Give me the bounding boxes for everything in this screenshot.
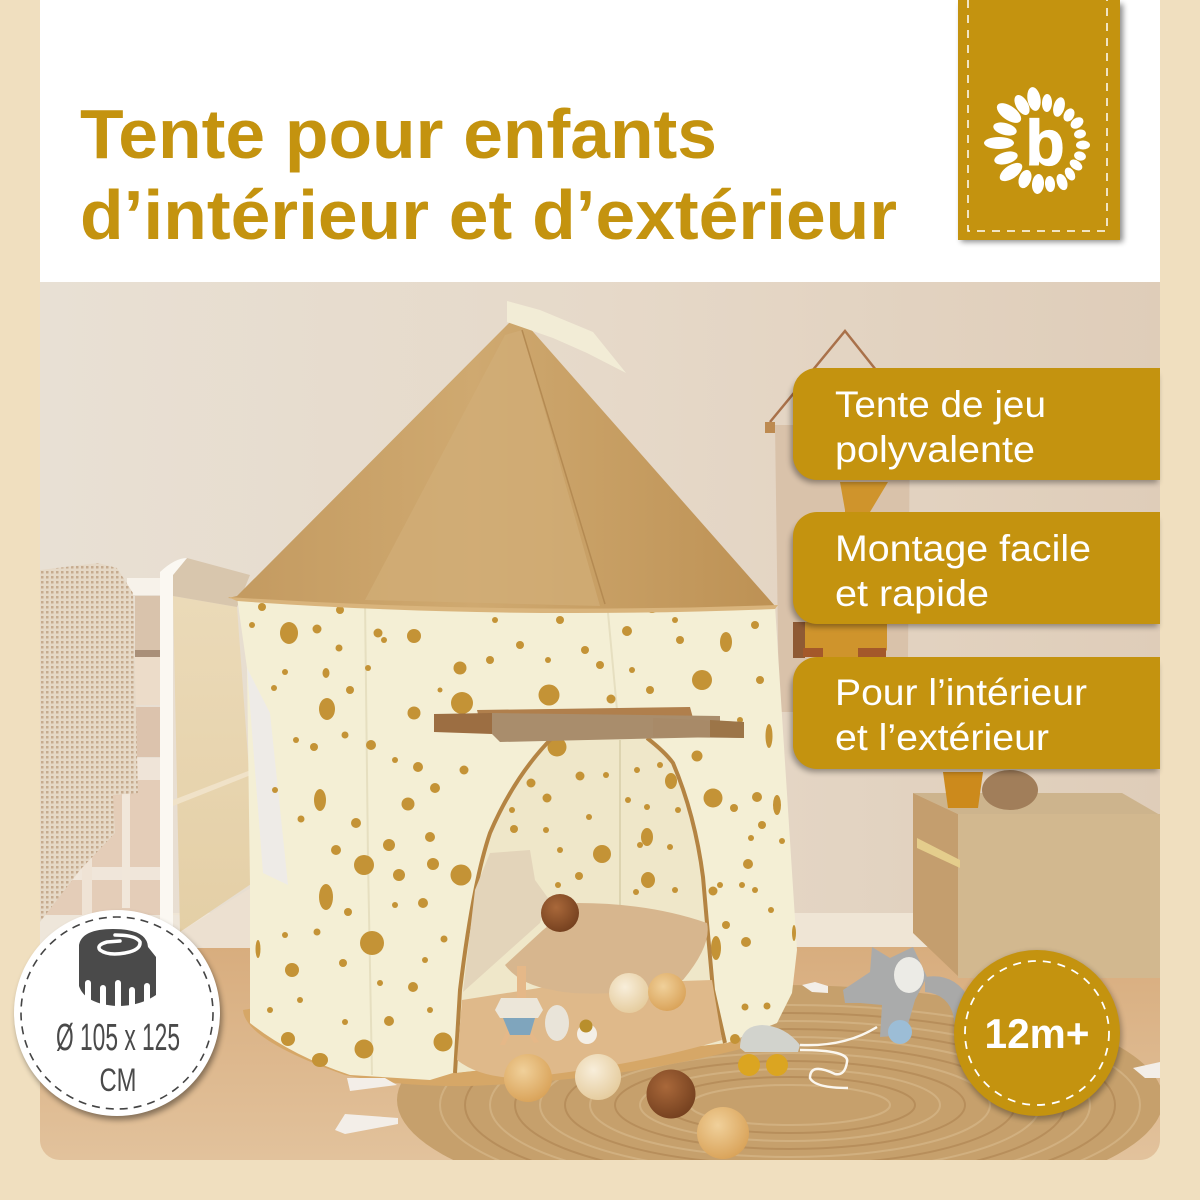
polka dots <box>249 594 796 1067</box>
feature badge 1 <box>791 368 1160 483</box>
size badge <box>14 910 222 1120</box>
tent seams <box>365 600 617 1075</box>
icon: measuring tape <box>79 929 156 1007</box>
feature badge 3: Pour l’intérieur <box>835 672 1087 713</box>
tent base rim <box>243 1008 741 1086</box>
tent roof <box>228 321 778 613</box>
cushions inside tent <box>457 850 722 1078</box>
toy elephant <box>843 947 970 1044</box>
title: d’intérieur et d’extérieur <box>80 176 897 254</box>
rolled door flap <box>434 707 744 742</box>
tent inner seam <box>619 740 621 905</box>
jute rug <box>397 985 1160 1160</box>
feature badge 3: et l’extérieur <box>835 717 1049 758</box>
icon: sun flower logo <box>984 86 1090 194</box>
feature badge 1: Tente de jeu <box>835 384 1046 425</box>
header panel <box>40 0 1160 282</box>
brand logo tag <box>958 0 1123 242</box>
photo: room scene <box>40 282 1163 1200</box>
tent doorway <box>455 737 725 1073</box>
tent window <box>247 668 288 885</box>
feature badge 2 <box>791 512 1160 627</box>
tent body <box>237 594 797 1080</box>
toy pull mouse <box>738 1025 877 1088</box>
feature badge 2: Montage facile <box>835 528 1091 569</box>
knitted blanket <box>40 563 138 922</box>
size text: Ø 105 x 125 <box>56 1017 180 1059</box>
wall <box>40 282 1160 922</box>
feature badge 3 <box>791 657 1160 772</box>
tent top flag <box>507 301 626 373</box>
age badge: 12m+ <box>984 1010 1090 1057</box>
balls <box>504 973 749 1159</box>
tassels <box>335 982 1160 1134</box>
title: Tente pour enfants <box>80 95 717 173</box>
logo letter: b <box>1025 107 1065 179</box>
crib <box>40 558 257 948</box>
title <box>80 95 897 254</box>
wooden floor <box>40 947 1160 1160</box>
wall hanging <box>765 331 910 712</box>
feature badge 2: et rapide <box>835 573 989 614</box>
toy spinning top <box>495 966 597 1045</box>
skirting board <box>182 913 928 947</box>
feature badge 1: polyvalente <box>835 429 1035 470</box>
door trim <box>455 737 725 1073</box>
storage box <box>913 770 1160 978</box>
age badge <box>954 950 1122 1120</box>
size badge: CM <box>100 1062 136 1098</box>
